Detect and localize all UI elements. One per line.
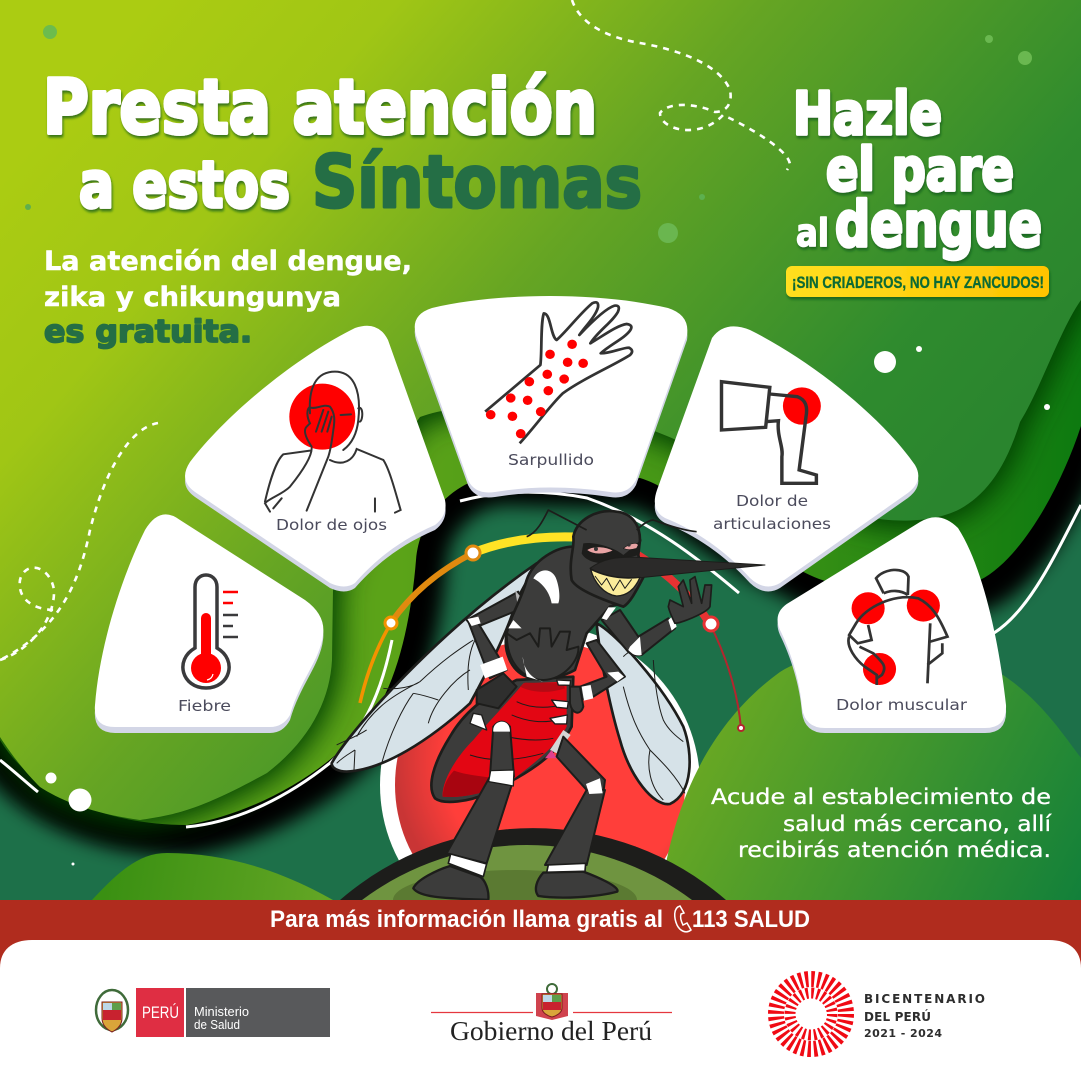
slogan: hazle el pare al dengue: Hazle [793,79,942,148]
coat of arms [96,990,128,1032]
label: fiebre: Fiebre [178,697,231,715]
label: dolor muscular: Dolor muscular [836,696,968,714]
abdomen [431,677,573,802]
call to action text [711,785,1052,863]
title: presta atencion: Presta atención [43,63,597,151]
free care statement: La atención del dengue, [44,246,412,277]
card: dolor de ojos [185,326,446,592]
logo: bicentenario [776,979,985,1049]
red hotline banner: Para más información llama gratis al [270,906,663,933]
ground mound [340,828,726,900]
top green layer [0,0,1081,820]
icon: thermometer [183,575,238,688]
grin [591,569,640,596]
raised arm and claw hand [602,577,712,655]
label: dolor de articulaciones [713,492,831,533]
logo: bicentenario: 2021 - 2024 [864,1027,942,1040]
decorative bubbles [25,25,1058,866]
coat of arms [536,984,568,1020]
logo: ministerio de salud [96,988,330,1037]
card: dolor muscular [778,517,1006,733]
card: fiebre [95,514,323,733]
card: sarpullido [415,296,687,498]
logo: gobierno del peru [431,984,672,1046]
lower right green hill [660,648,1081,900]
right leg [536,737,618,898]
yellow slogan pill [786,266,1049,297]
title: sintomas: Síntomas [312,140,642,224]
logo: gobierno del peru: Gobierno del Perú [450,1016,653,1046]
dark shadow of top layer [0,300,1081,840]
logo: ministerio de salud: Ministerio [194,1005,249,1019]
left leg [413,722,514,900]
icon: phone [675,906,691,932]
antennae [527,510,697,537]
label: dolor de articulaciones: Dolor de [736,492,808,510]
dashed flight path top [572,0,790,170]
dashed flight path left [0,423,158,660]
call to action text: recibirás atención médica. [738,838,1051,863]
white curved lines [0,760,38,792]
right wing [597,623,690,804]
icon: knee joint [722,382,821,483]
logo: ministerio de salud: de Salud [194,1018,240,1032]
red circle behind mosquito [380,632,699,860]
slogan: hazle el pare al dengue [793,79,1042,261]
logo: bicentenario: BICENTENARIO [864,992,985,1006]
black shadow of middle green layer [0,426,1081,864]
mosquito [332,510,765,900]
red hotline banner [0,900,1081,970]
call to action text: Acude al establecimiento de [711,785,1051,810]
left wing [332,563,537,772]
title: a estos: a estos [79,149,290,223]
eyes [587,543,638,554]
free care statement: es gratuita. [44,314,252,350]
icon: person covering eye [265,372,401,513]
left arm on hip [467,590,523,730]
bottom left hill [92,853,333,900]
logo: ministerio de salud: PERÚ [142,1003,179,1022]
thorax [506,547,630,679]
icon: body with muscle pain [848,570,947,685]
icon: arm with rash [485,302,632,443]
right lower arm on hip [570,640,625,713]
progress arc [360,537,744,731]
head [527,510,765,607]
free care statement: zika y chikungunya [44,282,341,313]
shoulder highlight [533,570,559,603]
proboscis [590,557,765,578]
card: dolor de articulaciones [655,326,918,592]
slogan: hazle el pare al dengue: el pare [826,135,1014,204]
eye mask [582,539,642,563]
logo: bicentenario: DEL PERÚ [864,1009,931,1024]
label: dolor de articulaciones: articulaciones [713,515,831,533]
call to action text: salud más cercano, allí [783,812,1052,837]
white footer [0,940,1081,1080]
red hotline banner: 113 SALUD [692,906,810,933]
label: sarpullido: Sarpullido [508,451,594,469]
chest claw hand [507,620,578,682]
icon: red sunburst [776,979,846,1049]
label: dolor de ojos: Dolor de ojos [276,516,387,534]
slogan: hazle el pare al dengue: al [796,211,829,255]
free care statement [44,246,412,350]
middle green layer [0,300,1081,825]
